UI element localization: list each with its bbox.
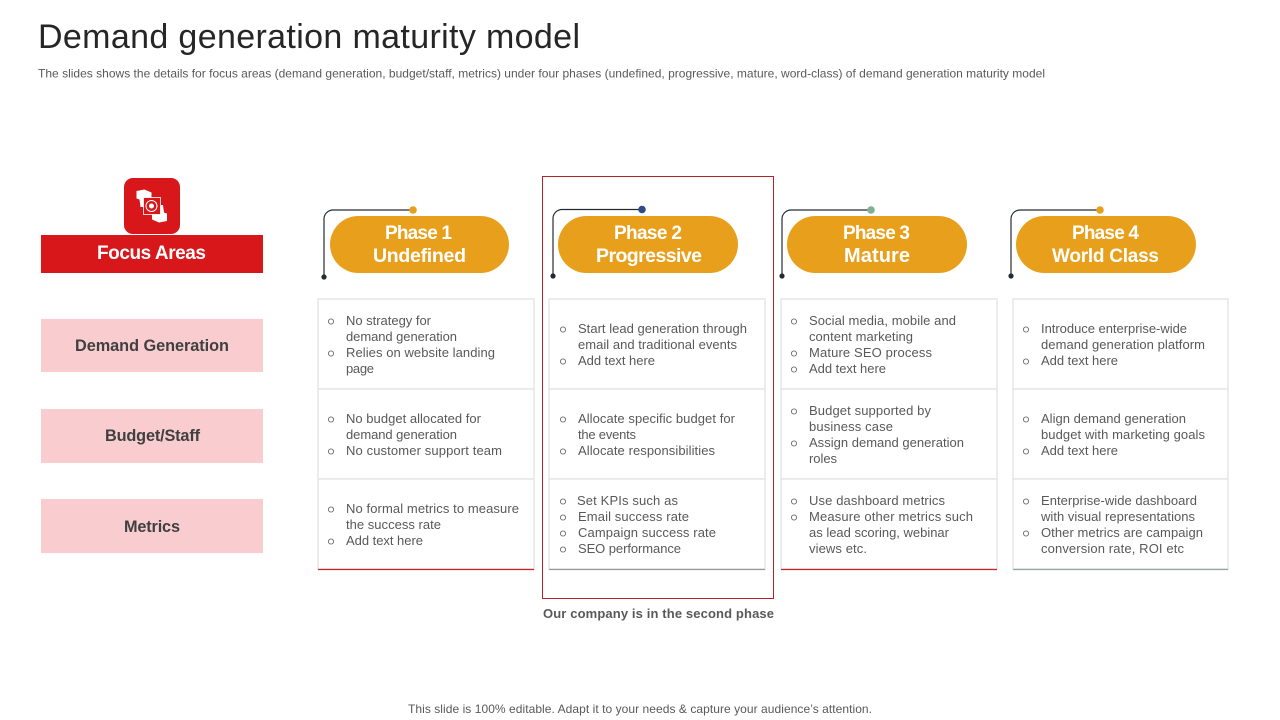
phase 4 budget text (1023, 411, 1206, 458)
phase 3 metrics text: as lead scoring, webinar (809, 525, 950, 540)
phase 1 budget text: demand generation (346, 427, 457, 442)
phase 2 pill: Phase 2 (614, 223, 682, 244)
phase 4 pill: World Class (1052, 246, 1159, 267)
phase 3 budget text: business case (809, 419, 893, 434)
phase 2 demand generation text: Start lead generation through (578, 321, 747, 336)
phase 4 demand generation text (1023, 321, 1205, 368)
phase 1 pill (330, 216, 509, 273)
phase 1 connector (321, 206, 417, 280)
phase 1 pill: Phase 1 (385, 223, 452, 244)
phase 2 budget text: the events (578, 427, 636, 442)
phase 4 budget text: Add text here (1041, 443, 1118, 458)
focus area: demand generation: Demand Generation (75, 337, 229, 355)
phase 2 connector (550, 206, 646, 279)
phase 4 demand generation text: demand generation platform (1041, 337, 1205, 352)
phase 3 metrics text: Measure other metrics such (809, 509, 973, 524)
phase 3 demand generation text: Mature SEO process (809, 345, 932, 360)
phase 1 column (318, 206, 534, 569)
phase 3 connector (779, 206, 875, 279)
phase 3 table (781, 299, 997, 570)
phase 4 pill (1016, 216, 1196, 273)
highlight frame: phase 2 (542, 176, 774, 598)
phase 2 column (549, 206, 765, 569)
phase 1 metrics text: Add text here (346, 533, 423, 548)
phase 1 demand generation text: demand generation (346, 329, 457, 344)
highlight caption: Our company is in the second phase (543, 606, 774, 621)
focus area: budget/staff (41, 409, 263, 463)
phase 3 demand generation text: content marketing (809, 329, 913, 344)
phase 1 demand generation text (328, 313, 495, 376)
phase 4 metrics text: Enterprise-wide dashboard (1041, 493, 1197, 508)
phase 4 metrics text: Other metrics are campaign (1041, 525, 1203, 540)
phase 4 budget text: Align demand generation (1041, 411, 1186, 426)
focus areas header (41, 235, 263, 273)
phase 3 metrics text (791, 493, 973, 556)
phase 2 metrics text (560, 493, 716, 556)
phase 1 table (318, 299, 534, 570)
phase 3 budget text: Assign demand generation (809, 435, 964, 450)
phase 1 metrics text: No formal metrics to measure (346, 501, 519, 516)
phase 3 column (779, 206, 997, 569)
phase 3 demand generation text (791, 313, 956, 376)
phase 1 pill: Undefined (373, 245, 466, 267)
phase 2 metrics text: Campaign success rate (578, 525, 716, 540)
phase 4 metrics text: conversion rate, ROI etc (1041, 541, 1184, 556)
phase 3 metrics text: views etc. (809, 541, 867, 556)
phase 3 metrics text: Use dashboard metrics (809, 493, 946, 508)
phase 1 demand generation text: No strategy for (346, 313, 432, 328)
phase 2 demand generation text: Add text here (578, 353, 655, 368)
phase 1 budget text: No budget allocated for (346, 411, 482, 426)
phase 4 demand generation text: Add text here (1041, 353, 1118, 368)
phase 2 metrics text: SEO performance (578, 541, 681, 556)
subtitle: The slides shows the details for focus areas (demand generation, budget/staff, metrics) under four phases (undefined, progressive, mature, word-class) of demand generation maturity model (38, 66, 1045, 80)
phase 2 table (549, 299, 765, 570)
phase 2 demand generation text (560, 321, 747, 368)
phase 4 table (1013, 299, 1228, 570)
phase 4 metrics text: with visual representations (1040, 509, 1196, 524)
icon: hands holding target (124, 178, 180, 234)
phase 2 budget text: Allocate specific budget for (578, 411, 736, 426)
focus area: demand generation (41, 319, 263, 372)
focus area: metrics: Metrics (124, 518, 180, 536)
phase 3 pill (787, 216, 967, 273)
phase 4 demand generation text: Introduce enterprise-wide (1041, 321, 1187, 336)
footer note: This slide is 100% editable. Adapt it to your needs & capture your audience’s attention. (408, 702, 872, 716)
phase 4 budget text: budget with marketing goals (1041, 427, 1206, 442)
phase 3 pill: Mature (844, 245, 910, 267)
phase 2 metrics text: Set KPIs such as (577, 493, 678, 508)
phase 3 budget text: roles (809, 451, 838, 466)
phase 2 pill: Progressive (596, 245, 702, 267)
phase 3 budget text (791, 403, 964, 466)
phase 4 metrics text (1023, 493, 1203, 556)
focus area: budget/staff: Budget/Staff (105, 427, 201, 445)
phase 4 pill: Phase 4 (1072, 223, 1139, 244)
phase 3 budget text: Budget supported by (809, 403, 932, 418)
focus areas header: Focus Areas (97, 243, 206, 264)
phase 1 metrics text (328, 501, 519, 548)
phase 2 demand generation text: email and traditional events (578, 337, 738, 352)
title: Demand generation maturity model (38, 18, 580, 56)
phase 2 budget text (560, 411, 736, 458)
phase 1 metrics text: the success rate (346, 517, 441, 532)
focus area: metrics (41, 499, 263, 553)
phase 2 metrics text: Email success rate (578, 509, 689, 524)
phase 3 demand generation text: Social media, mobile and (809, 313, 956, 328)
phase 3 demand generation text: Add text here (809, 361, 886, 376)
phase 4 column (1008, 206, 1228, 569)
phase 3 pill: Phase 3 (843, 223, 910, 244)
phase 4 connector (1008, 206, 1104, 279)
phase 2 pill (558, 216, 738, 273)
phase 1 budget text: No customer support team (346, 443, 502, 458)
phase 1 demand generation text: page (346, 361, 374, 376)
phase 1 demand generation text: Relies on website landing (346, 345, 495, 360)
phase 1 budget text (328, 411, 502, 458)
panel: focus areas (41, 178, 263, 553)
phase 2 budget text: Allocate responsibilities (578, 443, 716, 458)
